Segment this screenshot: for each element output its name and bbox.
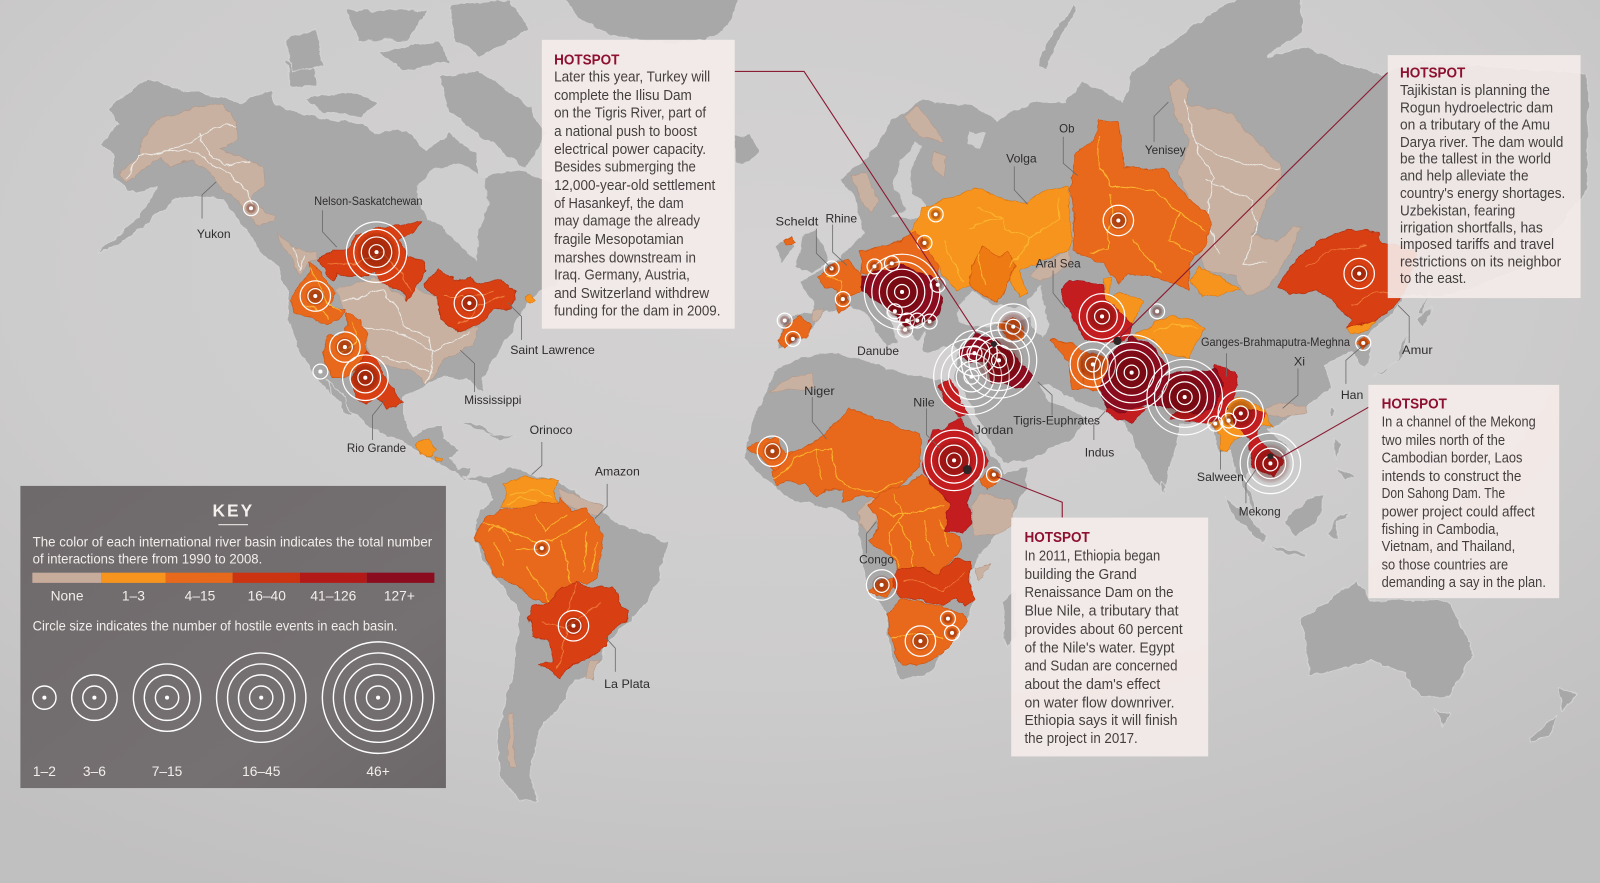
legend: circle size labels: 46+ (366, 764, 390, 779)
legend: color bar (32, 573, 434, 583)
basin: Cuanza (868, 577, 897, 597)
circles: Yukon (244, 201, 258, 216)
label: Salween: Salween (1197, 470, 1244, 484)
text block: hotspot Mekong: demanding a say in the plan. (1382, 575, 1546, 591)
label: Nile: Nile (913, 395, 935, 409)
circles: Irrawaddy (1208, 416, 1223, 431)
circles: La Plata (558, 611, 589, 641)
text block: hotspot Mekong: Cambodian border, Laos (1382, 450, 1522, 466)
basin: Senegal (747, 437, 793, 472)
text block: hotspot Turkey: a national push to boost (554, 124, 697, 140)
basin: Tigris-Euphrates (960, 334, 1035, 390)
basin: Mekong (1230, 406, 1283, 477)
legend: color bar labels: 41–126 (310, 589, 357, 604)
circles: Balkans one (887, 304, 902, 319)
panel: key (20, 486, 446, 788)
hotspot leader lines and dam markers (735, 71, 1388, 518)
circles: Amazon (534, 541, 549, 556)
basin: Yukon (118, 103, 274, 227)
label: Ob: Ob (1059, 122, 1075, 136)
basin: Niger and Lake Chad (770, 408, 921, 502)
circles: Jordan (934, 339, 1009, 414)
basin: Amur (1278, 230, 1417, 329)
basin: Ural (1031, 250, 1071, 281)
label: La Plata: La Plata (604, 677, 650, 691)
basin: Ganges-Brahmaputra-Meghna (1148, 370, 1224, 413)
basin: Indus south (1107, 398, 1148, 423)
heading: hotspot Turkey: HOTSPOT (554, 52, 619, 68)
basin: Nelson-Saskatchewan (316, 220, 427, 300)
basin: East Africa (969, 493, 1013, 536)
circles: Incomati (945, 625, 959, 640)
label: Danube: Danube (857, 344, 899, 358)
basin: Ganges east (1170, 365, 1239, 423)
text block: hotspot Tajikistan: and help alleviate the (1400, 169, 1529, 185)
circles: Salween (1218, 391, 1264, 436)
legend: circle sizes (33, 642, 434, 753)
label: Jordan: Jordan (974, 423, 1013, 437)
legend: color bar labels: None (51, 589, 84, 604)
basin: Helmand (1050, 340, 1084, 389)
text block: hotspot Mekong (1382, 415, 1546, 591)
circles: Helmand (1070, 342, 1116, 387)
basin: Saint Lawrence (423, 268, 516, 332)
label: Amazon: Amazon (595, 465, 640, 479)
basin: Chile (508, 715, 515, 768)
circles: Tarim (1150, 304, 1165, 319)
panel: hotspot Mekong (1368, 385, 1559, 598)
basin: Sweden (850, 174, 878, 213)
label: Rhine: Rhine (826, 212, 857, 226)
basin: Karelia (933, 150, 947, 177)
text block: hotspot Ethiopia: building the Grand (1024, 567, 1137, 583)
label: Mekong: Mekong (1239, 505, 1281, 519)
circles: Guadiana (785, 331, 800, 346)
circles: Nile (924, 430, 984, 491)
basin: Juba (980, 470, 1002, 490)
basin: Amur mouth (1346, 321, 1377, 334)
basin: Amazon (473, 497, 603, 603)
label: Congo: Congo (859, 552, 894, 566)
basin: Southern Africa (888, 598, 966, 667)
circles: Rhone (835, 292, 850, 307)
basin: Yenisey (1168, 80, 1302, 295)
text block: hotspot Tajikistan: Darya river. The dam would (1400, 135, 1563, 151)
label: Saint Lawrence: Saint Lawrence (510, 343, 595, 357)
text block: hotspot Tajikistan: restrictions on its neighbor (1400, 254, 1561, 270)
text block: hotspot Turkey: 12,000-year-old settlement (554, 178, 715, 194)
text block: hotspot Ethiopia: In 2011, Ethiopia began (1024, 548, 1160, 564)
circles: Han (1356, 336, 1371, 350)
text block: hotspot Mekong: power project could affect (1382, 505, 1535, 521)
text block: hotspot Ethiopia: Renaissance Dam on the (1024, 585, 1173, 601)
river basins: none (118, 80, 1306, 768)
basin: Han (1356, 337, 1369, 350)
text block: hotspot Tajikistan: Tajikistan is planning the (1400, 83, 1550, 99)
basin: Tarim (1132, 316, 1206, 358)
river basin labels (197, 102, 1433, 691)
legend: circle size labels: 7–15 (152, 764, 183, 779)
circles: Senegal (757, 436, 788, 466)
label: Rio Grande: Rio Grande (347, 441, 406, 455)
text block: hotspot Turkey: fragile Mesopotamian (554, 232, 684, 248)
label: Yenisey: Yenisey (1145, 143, 1187, 157)
basin: Aral Sea (1061, 280, 1132, 343)
label: Indus: Indus (1085, 445, 1114, 459)
text block: hotspot Tajikistan: be the tallest in the world (1400, 151, 1551, 167)
heading: key: KEY (212, 501, 254, 521)
basin: Nile lower (940, 379, 967, 416)
heading: hotspot Mekong: HOTSPOT (1382, 396, 1447, 412)
circles: Rhine (867, 259, 882, 274)
legend: circle size labels (33, 764, 390, 779)
text: circle explanation: Circle size indicates the number of hostile events in each basin. (33, 618, 397, 633)
river basins: 4-15 interactions (290, 119, 1369, 667)
heading: hotspot Ethiopia: HOTSPOT (1024, 530, 1090, 546)
legend: color bar labels: 16–40 (248, 589, 286, 604)
heading: hotspot Tajikistan: HOTSPOT (1400, 66, 1465, 82)
basin: Irrawaddy and Salween (1208, 397, 1272, 452)
circles: Orange (905, 626, 936, 656)
text block: hotspot Tajikistan (1400, 83, 1565, 287)
circles: Balkans five (898, 322, 913, 337)
text block: hotspot Mekong: fishing in Cambodia, (1382, 522, 1499, 538)
text block: hotspot Ethiopia: about the dam's effect (1024, 677, 1160, 693)
basin: Kura-Araks (998, 316, 1026, 340)
circles: Balkans two (900, 313, 915, 328)
basin: Columbia (290, 261, 347, 325)
text block: hotspot Mekong: intends to construct the (1382, 469, 1521, 485)
legend: circle size labels: 16–45 (242, 764, 281, 779)
text block: hotspot Turkey: Besides submerging the (554, 159, 696, 175)
river lines on tan basins (127, 100, 1280, 383)
text block: hotspot Mekong: Don Sahong Dam. The (1382, 486, 1505, 502)
text block: hotspot Ethiopia: Blue Nile, a tributary that (1024, 604, 1179, 620)
label: Orinoco: Orinoco (530, 423, 573, 437)
legend: circle size labels: 1–2 (33, 764, 56, 779)
label: Volga: Volga (1006, 151, 1037, 165)
circles: Scheldt (824, 261, 839, 276)
text block: hotspot Turkey: marshes downstream in (554, 250, 696, 266)
text block: hotspot Mekong: Vietnam, and Thailand, (1382, 539, 1515, 555)
basin: Scheldt and Rhone (819, 260, 862, 313)
river basins: 127+ interactions (861, 266, 1224, 413)
basin: Nile (921, 416, 989, 533)
legend: color bar labels: 1–3 (122, 589, 145, 604)
circles: Cuanza (866, 570, 897, 600)
basin: Colorado (323, 313, 373, 377)
text block: hotspot Tajikistan: irrigation shortfalls, has (1400, 221, 1543, 237)
circles: Columbia (300, 281, 331, 311)
text block: hotspot Turkey: Later this year, Turkey will (554, 70, 710, 86)
basin: Zambezi (893, 558, 973, 606)
text block: hotspot Turkey: may damage the already (554, 214, 701, 230)
basin: northwest Africa (769, 374, 814, 393)
basin: Helmand east (1082, 352, 1112, 393)
text block: hotspot Tajikistan: to the east. (1400, 271, 1466, 287)
circles: Elbe (884, 256, 899, 271)
panel: hotspot Ethiopia (1011, 518, 1208, 756)
text block: hotspot Tajikistan: Uzbekistan, fearing (1400, 203, 1515, 219)
circles: Limpopo (941, 611, 955, 626)
circles: Juba (986, 467, 1001, 482)
label: Han: Han (1341, 388, 1363, 402)
river basins: 16-40 interactions (316, 220, 1417, 679)
basin: southern Uruguay (586, 658, 598, 679)
circles: Balkans four (922, 314, 937, 329)
text block: hotspot Ethiopia (1024, 548, 1183, 747)
circles: Rio Grande (343, 355, 388, 400)
circles: Ganges (1147, 359, 1222, 435)
circles: Danube (864, 254, 940, 330)
basin: Central America (415, 439, 437, 456)
circles: Ob (1103, 205, 1134, 236)
basin: Mississippi (337, 277, 480, 384)
hostile event circles (244, 201, 1374, 656)
basin: Rhine and Elbe (860, 232, 940, 280)
basin: Ob (1070, 119, 1212, 290)
text block: hotspot Ethiopia: the project in 2017. (1024, 731, 1138, 747)
basin: Limpopo coast (974, 565, 990, 580)
text block: hotspot Ethiopia: of the Nile's water. Egypt (1024, 640, 1174, 656)
basin: Danube (861, 266, 944, 327)
river lines on orange basins (302, 137, 1206, 638)
label: Xi: Xi (1294, 354, 1305, 368)
text block: hotspot Turkey: complete the Ilisu Dam (554, 88, 692, 104)
text block: hotspot Ethiopia: provides about 60 percent (1024, 622, 1183, 638)
text block: hotspot Tajikistan: imposed tariffs and travel (1400, 237, 1554, 253)
basin: Don (971, 247, 1016, 303)
basin: Fraser (277, 232, 316, 277)
circles: Tijuana (313, 364, 328, 379)
label: Yukon: Yukon (197, 227, 231, 241)
legend: color bar labels: 4–15 (185, 589, 216, 604)
text block: hotspot Ethiopia: and Sudan are concerned (1024, 659, 1178, 675)
panel: hotspot Turkey (542, 40, 735, 329)
text block: hotspot Ethiopia: on water flow downriver. (1024, 695, 1174, 711)
inland seas (416, 131, 1051, 337)
basin: Volga and Dnieper (909, 187, 1071, 303)
label: Aral Sea: Aral Sea (1036, 256, 1081, 270)
basin: Norway (903, 107, 944, 143)
basin: Iberia (779, 315, 812, 348)
circles: Balkans three (910, 313, 925, 328)
legend: circle size labels: 3–6 (83, 764, 106, 779)
basin: Iberia (812, 309, 824, 323)
circles: Mekong (1240, 433, 1301, 494)
basin: Congo (869, 475, 963, 575)
text block: hotspot Turkey: on the Tigris River, part of (554, 105, 707, 121)
basin: Guianas (558, 488, 602, 516)
text: color explanation (33, 535, 433, 566)
river lines on red-orange basins (327, 245, 1398, 669)
text block: hotspot Tajikistan: country's energy shortages. (1400, 186, 1565, 202)
text block: hotspot Turkey: Iraq. Germany, Austria, (554, 268, 690, 284)
text block: hotspot Turkey: electrical power capacity. (554, 142, 706, 158)
text: color explanation: of interactions there from 1990 to 2008. (33, 551, 262, 566)
label: Mississippi: Mississippi (464, 393, 521, 407)
text block: hotspot Mekong: so those countries are (1382, 558, 1508, 574)
label: Nelson-Saskatchewan: Nelson-Saskatchewan (314, 194, 423, 208)
circles: Dniester (930, 277, 945, 292)
text block: hotspot Turkey: and Switzerland withdrew (554, 286, 709, 302)
basin: Rio Grande (350, 350, 402, 410)
river basins: 1-3 interactions (415, 187, 1377, 508)
label: Tigris-Euphrates: Tigris-Euphrates (1013, 414, 1100, 428)
basin: Ireland (785, 236, 794, 246)
text block: hotspot Turkey (554, 70, 720, 319)
basin: Syr Darya (1104, 278, 1143, 325)
circles: Indus (1094, 335, 1169, 410)
text block: hotspot Turkey: funding for the dam in 2009. (554, 303, 720, 319)
basin: Gulf of Guinea (858, 492, 880, 532)
text: color explanation: The color of each international river basin indicates the total number (33, 535, 433, 550)
circles: Oder (917, 236, 932, 250)
river basins: 41-126 interactions (921, 280, 1283, 533)
basin: Ili (1191, 266, 1241, 297)
basin: Central America south (434, 456, 443, 461)
basin: Indus (1100, 337, 1168, 413)
text block: hotspot Turkey: of Hasankeyf, the dam (554, 196, 684, 212)
basin: La Plata (530, 582, 630, 679)
circles: Orontes (952, 330, 997, 376)
text block: hotspot Tajikistan: Rogun hydroelectric dam (1400, 100, 1553, 116)
circles: Tagus (777, 313, 792, 328)
circles: Saint Lawrence (454, 288, 485, 318)
label: Niger: Niger (804, 384, 835, 398)
basin: Saint John (526, 294, 535, 304)
text block: hotspot Tajikistan: on a tributary of the Amu (1400, 118, 1550, 134)
text block: hotspot Ethiopia: Ethiopia says it will finish (1024, 713, 1178, 729)
text block: hotspot Mekong: In a channel of the Mekong (1382, 415, 1536, 431)
basin: Orinoco (500, 477, 558, 508)
text block: hotspot Mekong: two miles north of the (1382, 433, 1505, 449)
circles: Tigris-Euphrates (961, 323, 1037, 398)
circles: Kura-Araks (991, 304, 1036, 349)
label: Ganges-Brahmaputra-Meghna: Ganges-Brahmaputra-Meghna (1201, 335, 1350, 349)
circles: Amur (1344, 258, 1374, 289)
label: Scheldt: Scheldt (776, 215, 819, 229)
basin: Xi (1264, 403, 1306, 416)
circles: Vistula (928, 207, 943, 222)
legend: color bar labels: 127+ (384, 589, 415, 604)
legend: color bar labels (51, 589, 415, 604)
circles: Nelson-Saskatchewan (346, 222, 407, 282)
circles: Irrawaddy upper (1221, 413, 1236, 428)
panel: hotspot Tajikistan (1388, 55, 1581, 298)
circles: Aral Sea (1079, 294, 1125, 339)
label: Amur: Amur (1402, 343, 1433, 357)
circles: Colorado (330, 332, 360, 362)
